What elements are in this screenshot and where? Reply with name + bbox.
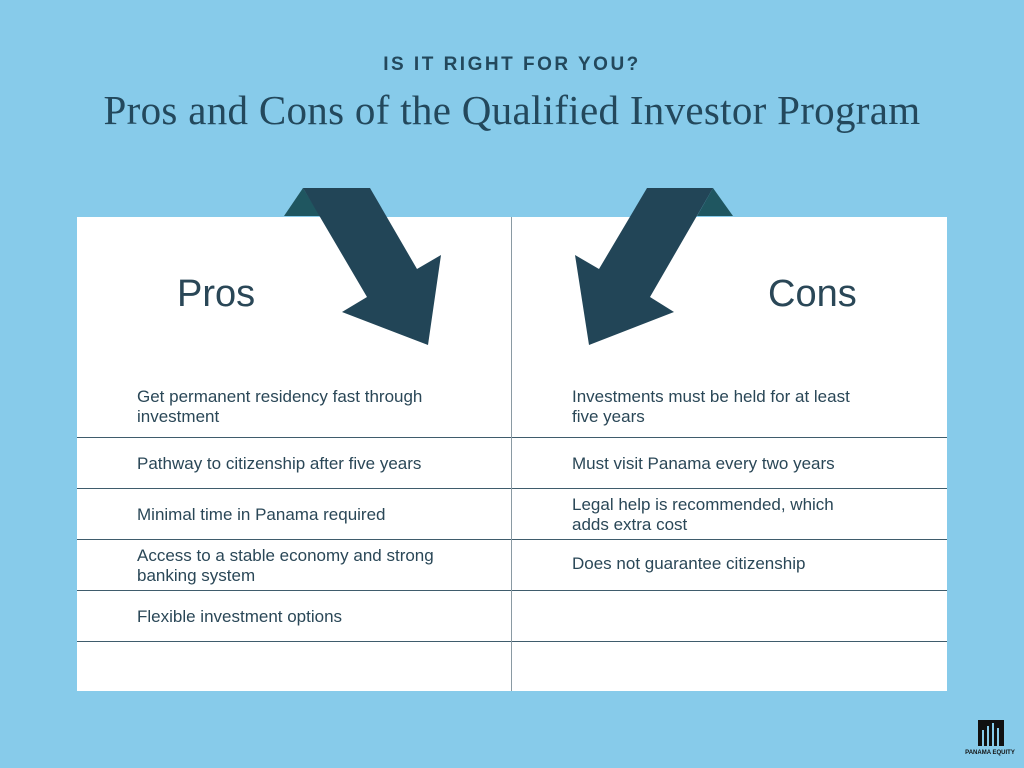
icon: right arrow: [575, 188, 733, 345]
table panel: Pathway to citizenship after five years: [137, 454, 421, 473]
logo: [965, 720, 1015, 756]
table panel: Minimal time in Panama required: [137, 505, 386, 524]
subtitle: IS IT RIGHT FOR YOU?: [383, 54, 641, 75]
table panel: Legal help is recommended, which adds extra cost: [572, 495, 834, 534]
pros list: Get permanent residency fast through investment: [137, 387, 422, 426]
table panel: [77, 217, 947, 691]
heading: cons: Cons: [768, 273, 857, 315]
table panel: Flexible investment options: [137, 607, 342, 626]
logo: PANAMA EQUITY: [965, 750, 1015, 756]
table panel: Does not guarantee citizenship: [572, 554, 805, 573]
heading: pros: Pros: [177, 273, 255, 315]
table panel: Must visit Panama every two years: [572, 454, 835, 473]
cons list: Investments must be held for at least five years: [572, 387, 850, 426]
title: Pros and Cons of the Qualified Investor Program: [104, 87, 920, 133]
icon: left arrow: [284, 188, 441, 345]
table panel: Access to a stable economy and strong banking system: [137, 546, 434, 585]
